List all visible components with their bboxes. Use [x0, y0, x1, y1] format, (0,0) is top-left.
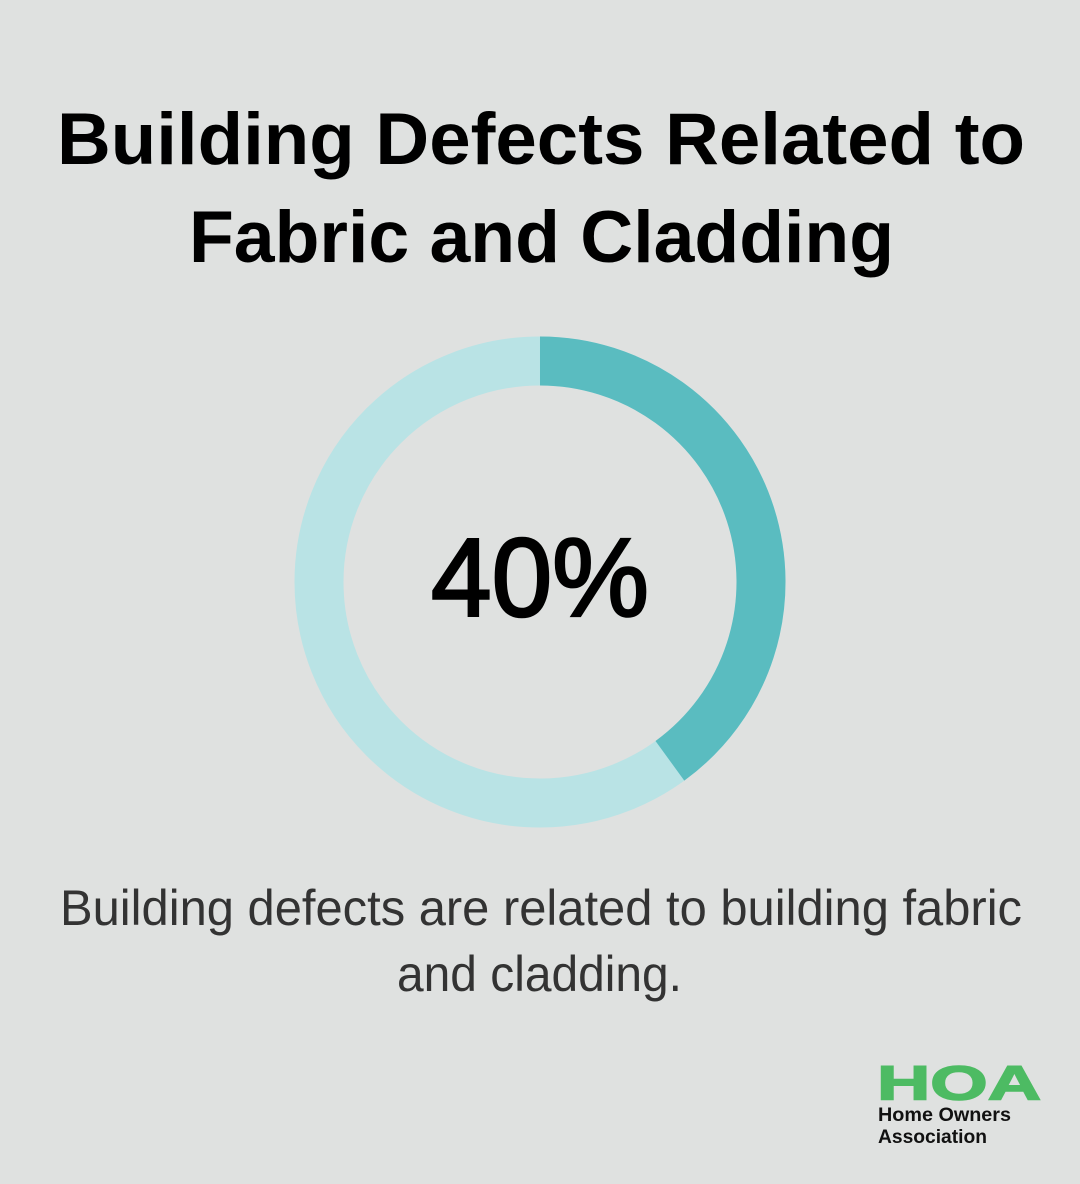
percentage value: 40% [431, 516, 649, 640]
title: Fabric and Cladding [189, 197, 894, 278]
title [57, 99, 1025, 278]
donut chart: 40% [319, 361, 761, 803]
logo name: Home Owners [878, 1105, 1011, 1126]
description text: and cladding. [397, 946, 682, 1002]
description text [60, 880, 1022, 1002]
logo: HOA Home Owners Association [877, 1058, 1041, 1148]
description text: Building defects are related to building fabric [60, 880, 1022, 936]
logo name: Association [878, 1127, 987, 1148]
title: Building Defects Related to [57, 99, 1025, 180]
logo mark text: HOA [877, 1058, 1041, 1110]
logo name [878, 1105, 1011, 1148]
